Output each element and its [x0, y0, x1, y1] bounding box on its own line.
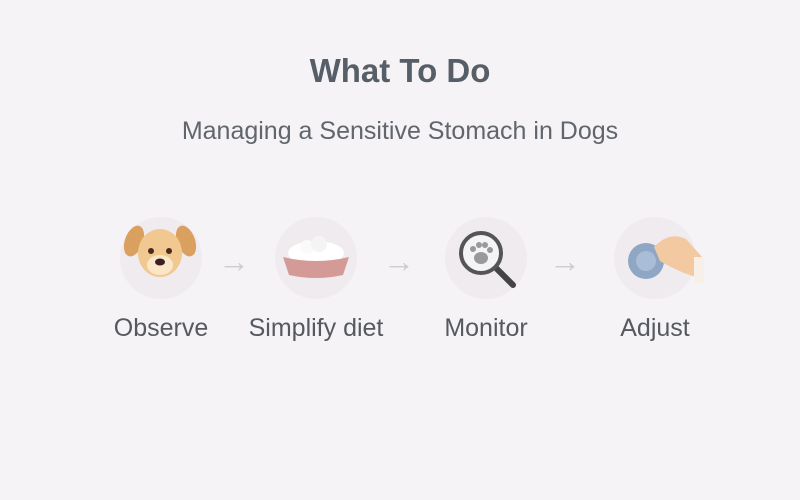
subtitle: Managing a Sensitive Stomach in Dogs: [182, 117, 618, 145]
step: adjust: [620, 236, 704, 342]
step: monitor: [444, 231, 528, 342]
icon: magnifier: [445, 217, 527, 299]
icon: hand with dial: [614, 217, 696, 299]
arrow: →: [549, 243, 581, 279]
icon: dog: [120, 217, 202, 299]
icon: bowl: [275, 217, 357, 299]
title: What To Do: [310, 52, 490, 89]
label: Observe: [114, 314, 208, 342]
step: observe: [114, 226, 208, 342]
step: simplify diet: [249, 242, 384, 342]
arrow: →: [383, 243, 415, 279]
label: Adjust: [620, 314, 690, 342]
arrow: →: [218, 243, 250, 279]
label: Simplify diet: [249, 314, 383, 342]
label: Monitor: [444, 314, 528, 342]
